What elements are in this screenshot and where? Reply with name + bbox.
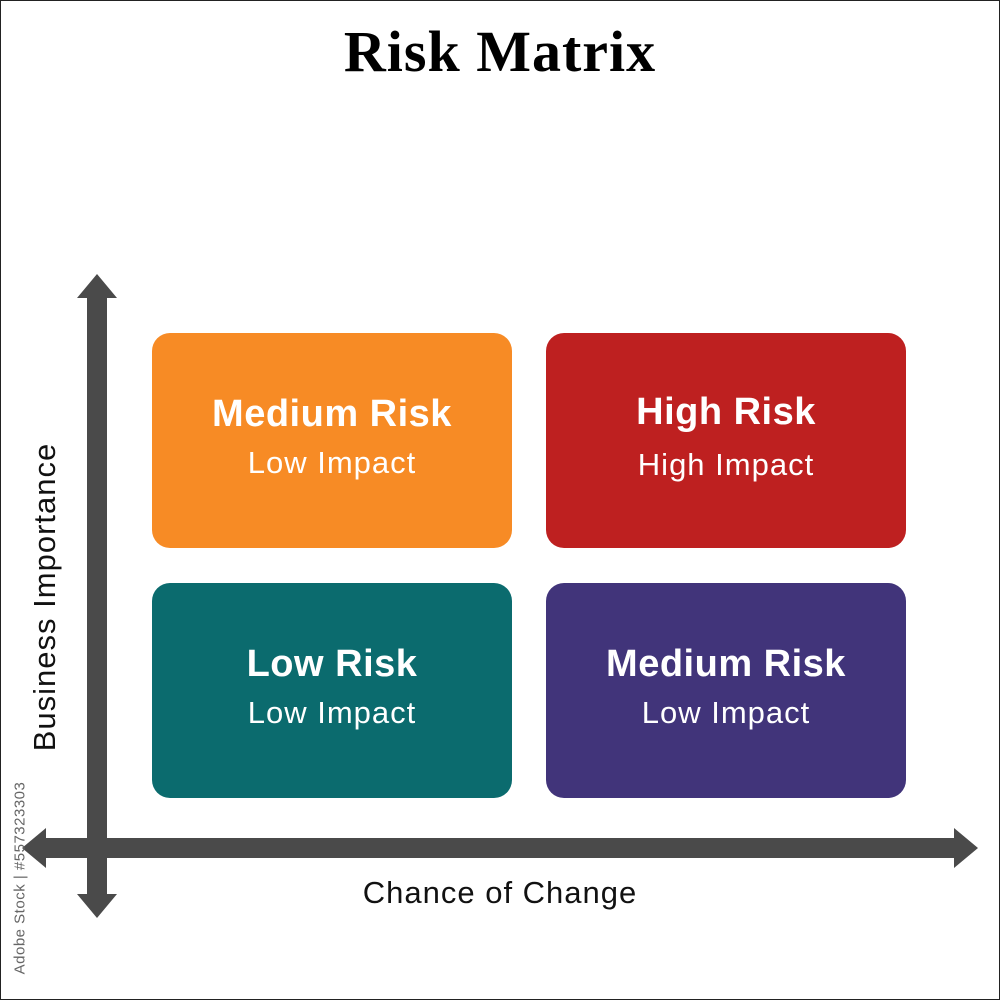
box: high risk: High Risk	[636, 391, 816, 433]
box: low risk: Low Impact	[248, 695, 416, 730]
title: Risk Matrix	[344, 19, 656, 84]
box: low risk	[152, 583, 512, 798]
box: medium risk bottom-right	[546, 583, 906, 798]
box: medium risk bottom-right: Medium Risk	[606, 643, 846, 685]
watermark side text: Adobe Stock | #557323303	[12, 782, 28, 974]
box: medium risk top-left: Medium Risk	[212, 393, 452, 435]
box: medium risk top-left: Low Impact	[248, 445, 416, 480]
x-axis label: Chance of Change	[363, 875, 637, 910]
box: medium risk top-left	[152, 333, 512, 548]
box: high risk	[546, 333, 906, 548]
box: medium risk bottom-right: Low Impact	[642, 695, 810, 730]
arrow: horizontal axis	[22, 828, 978, 868]
arrow: vertical axis	[77, 274, 117, 918]
y-axis label: Business Importance	[27, 443, 62, 751]
box: high risk: High Impact	[638, 447, 814, 482]
box: low risk: Low Risk	[247, 643, 417, 685]
